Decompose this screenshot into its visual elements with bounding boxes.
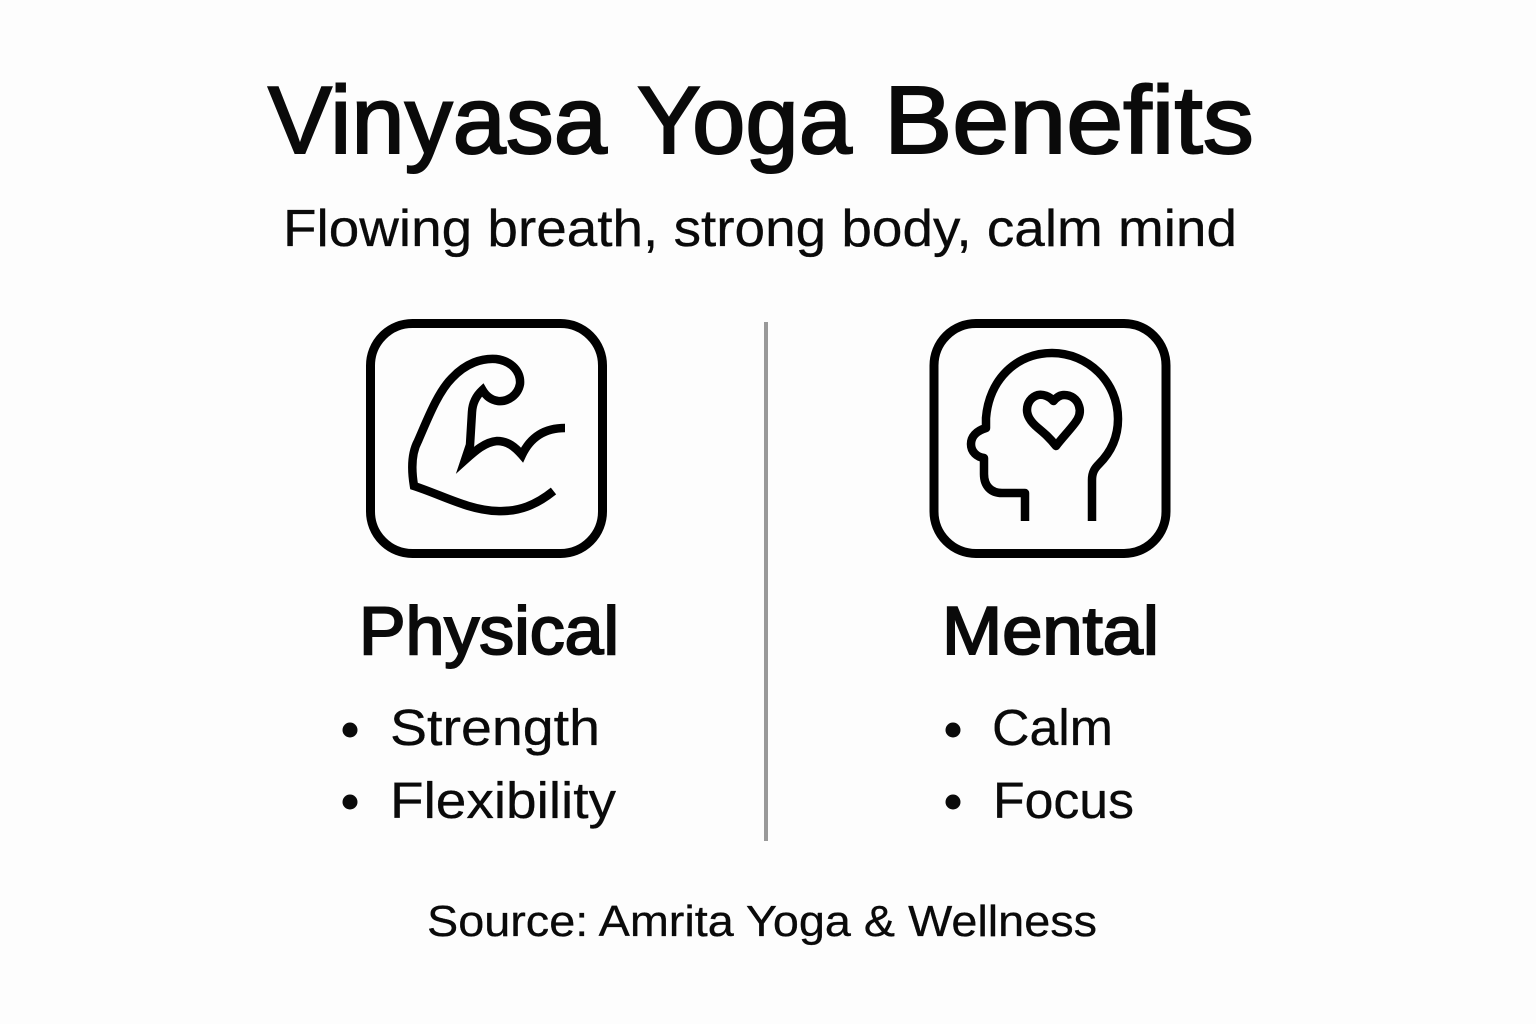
list: physical benefits — [342, 699, 617, 829]
subtitle: Flowing breath, strong body, calm mind — [283, 200, 1237, 258]
list: mental benefits: Focus — [993, 772, 1134, 829]
panel: mental — [934, 324, 1166, 829]
panel: physical — [342, 324, 619, 829]
title: Benefits — [884, 67, 1254, 174]
title: Yoga — [637, 67, 853, 174]
list: physical benefits: Flexibility — [390, 772, 617, 829]
source note: Source: Amrita Yoga & Wellness — [427, 897, 1097, 946]
icon: head with heart — [934, 324, 1166, 554]
column divider — [764, 322, 768, 841]
title — [268, 67, 1254, 174]
heading: Physical: Physical — [359, 593, 619, 669]
list: mental benefits — [946, 699, 1134, 829]
heading: Mental: Mental — [942, 593, 1159, 669]
list: physical benefits: Strength — [390, 699, 600, 756]
list: mental benefits: Calm — [992, 699, 1113, 756]
title: Vinyasa — [268, 67, 608, 174]
icon: flexed arm muscle — [370, 324, 602, 554]
